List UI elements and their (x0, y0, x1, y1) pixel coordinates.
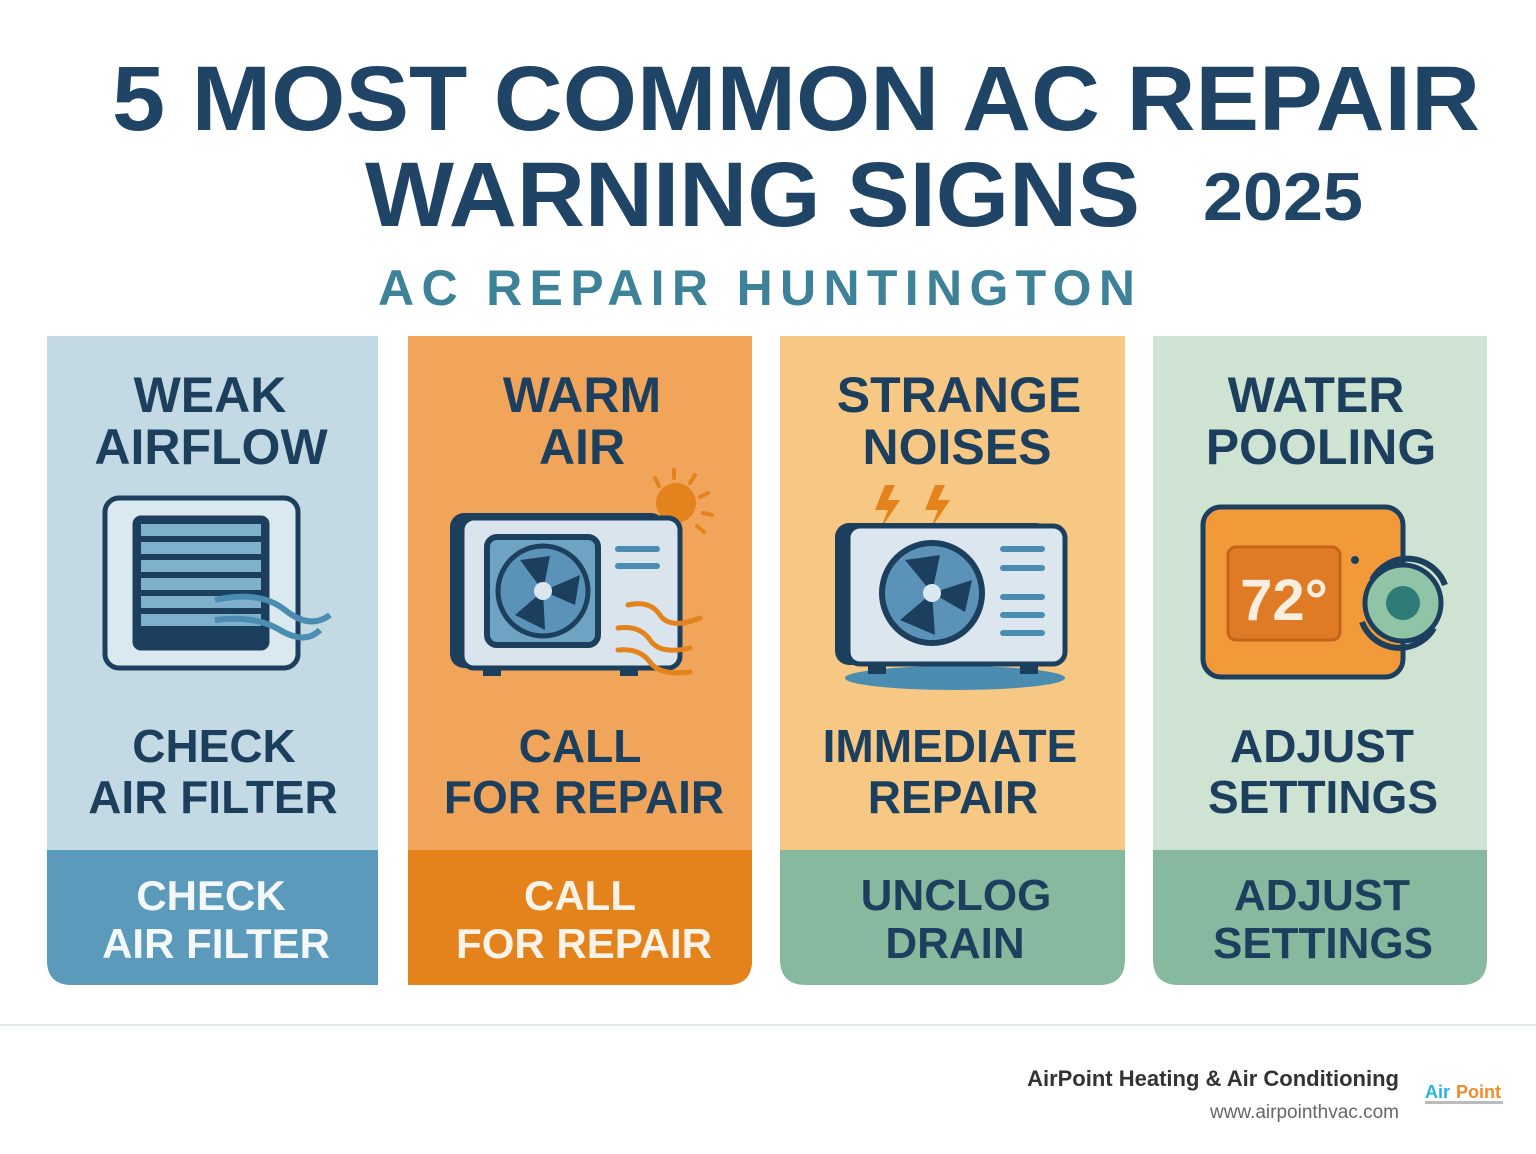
heading: water pooling: POOLING (1206, 419, 1436, 475)
icon: noisy unit with puddle (835, 485, 1065, 690)
heading: weak airflow (94, 367, 328, 475)
heading: strange noises (837, 367, 1081, 475)
action: check air filter: AIR FILTER (102, 920, 330, 967)
text: immediate repair: IMMEDIATE (823, 720, 1077, 772)
icon: thermostat 72 (1203, 507, 1445, 677)
logo: airpoint (1425, 1082, 1503, 1104)
action: adjust settings: ADJUST (1234, 871, 1410, 920)
title: WARNING SIGNS (365, 144, 1140, 246)
heading: warm air: AIR (539, 419, 625, 475)
panel: weak airflow (47, 336, 378, 985)
text: check air filter: CHECK (132, 720, 296, 772)
footer url: www.airpointhvac.com (1209, 1102, 1399, 1123)
action: unclog drain: UNCLOG (861, 871, 1051, 920)
title: 5 MOST COMMON AC REPAIR (112, 48, 1480, 150)
text: adjust settings (1208, 720, 1438, 823)
title: 2025 (1203, 159, 1363, 235)
text: adjust settings: ADJUST (1230, 720, 1414, 772)
icon: thermostat 72: 72° (1240, 568, 1328, 633)
text: check air filter (88, 720, 338, 823)
action: call for repair (456, 872, 712, 967)
heading: weak airflow: AIRFLOW (94, 419, 328, 475)
text: call for repair (444, 720, 724, 823)
action: check air filter (102, 872, 330, 967)
footer company name: AirPoint Heating & Air Conditioning (1027, 1066, 1399, 1091)
heading: water pooling (1206, 367, 1436, 475)
heading: water pooling: WATER (1228, 367, 1404, 423)
subtitle: AC REPAIR HUNTINGTON (378, 260, 1135, 316)
text: immediate repair (823, 720, 1077, 823)
text: immediate repair: REPAIR (868, 771, 1038, 823)
title (112, 48, 1480, 246)
panel: strange noises (780, 336, 1125, 985)
heading: warm air: WARM (503, 367, 661, 423)
logo: airpoint: Air (1425, 1082, 1450, 1102)
text: call for repair: FOR REPAIR (444, 771, 724, 823)
heading: weak airflow: WEAK (134, 367, 286, 423)
heading: strange noises: NOISES (863, 419, 1051, 475)
action: adjust settings (1213, 871, 1433, 968)
action: unclog drain (861, 871, 1051, 968)
action: call for repair: FOR REPAIR (456, 920, 712, 967)
text: call for repair: CALL (519, 720, 641, 772)
action: check air filter: CHECK (136, 872, 286, 919)
panel: water pooling (1153, 336, 1487, 985)
logo: airpoint: Point (1456, 1082, 1501, 1102)
panel: warm air (408, 336, 752, 985)
heading: warm air (503, 367, 661, 475)
action: unclog drain: DRAIN (885, 919, 1025, 968)
action: adjust settings: SETTINGS (1213, 919, 1433, 968)
icon: outdoor unit with sun (450, 470, 712, 676)
action: call for repair: CALL (524, 872, 636, 919)
text: adjust settings: SETTINGS (1208, 771, 1438, 823)
icon: air vent (105, 498, 330, 668)
heading: strange noises: STRANGE (837, 367, 1081, 423)
text: check air filter: AIR FILTER (88, 771, 338, 823)
